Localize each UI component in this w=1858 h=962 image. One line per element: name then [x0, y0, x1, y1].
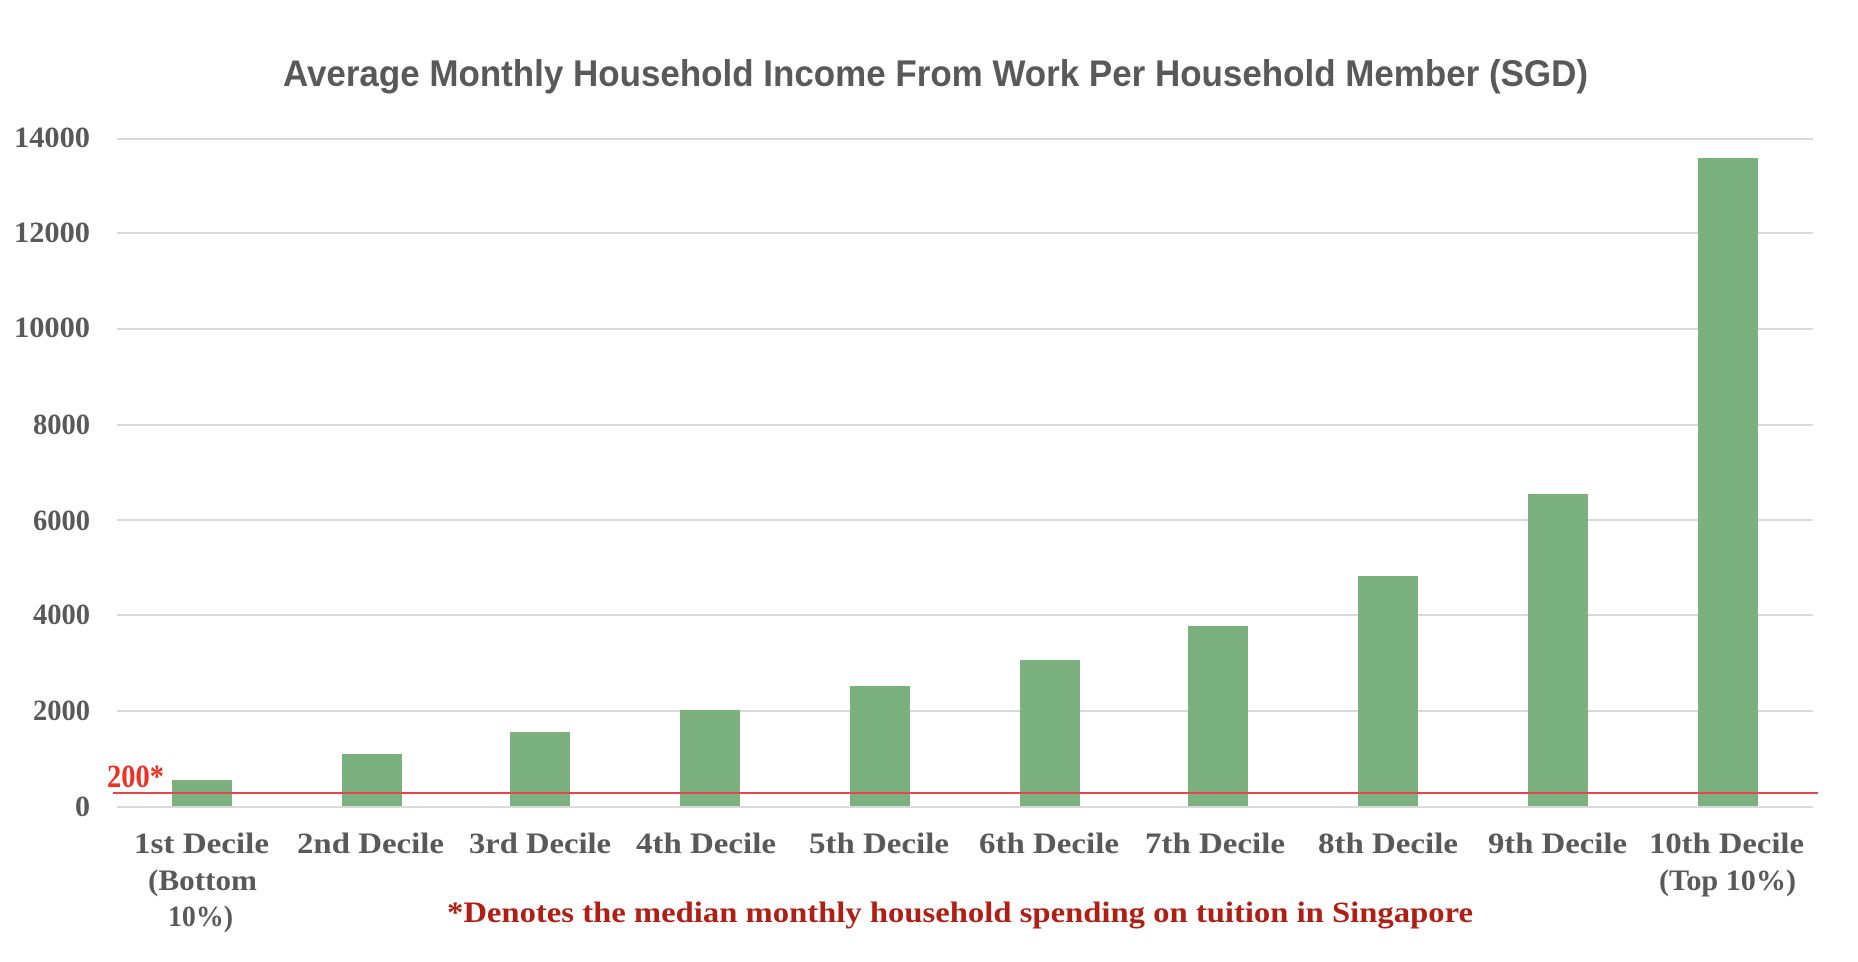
y axis labels: 8000 [33, 408, 90, 441]
reference line label: 200* [107, 759, 164, 795]
category labels: 5th Decile [809, 827, 949, 860]
category labels [134, 827, 1804, 933]
category labels: 4th Decile [636, 827, 776, 860]
category labels: 7th Decile [1145, 827, 1285, 860]
y axis labels: 4000 [33, 598, 90, 631]
y axis labels: 14000 [14, 121, 90, 154]
category labels: 10%) [168, 900, 233, 933]
y axis labels: 0 [75, 790, 90, 823]
y axis labels: 2000 [33, 694, 90, 727]
category labels: 1st Decile [134, 827, 269, 860]
y axis labels [14, 121, 90, 823]
category labels: 9th Decile [1488, 827, 1627, 860]
y axis labels: 6000 [33, 504, 90, 537]
category labels: 6th Decile [979, 827, 1119, 860]
category labels: (Bottom [148, 864, 257, 897]
reference line: median tuition spending [113, 792, 1818, 794]
category labels: 2nd Decile [297, 827, 444, 860]
category labels: 3rd Decile [469, 827, 611, 860]
y axis labels: 10000 [14, 311, 90, 344]
category labels: 8th Decile [1318, 827, 1458, 860]
title: Average Monthly Household Income From Work Per Household Member (SGD) [283, 53, 1588, 94]
bar chart: income by decile [172, 158, 1758, 806]
category labels: (Top 10%) [1659, 864, 1796, 897]
footnote: *Denotes the median monthly household spending on tuition in Singapore [447, 896, 1473, 929]
category labels: 10th Decile [1649, 827, 1804, 860]
y axis labels: 12000 [14, 216, 90, 249]
